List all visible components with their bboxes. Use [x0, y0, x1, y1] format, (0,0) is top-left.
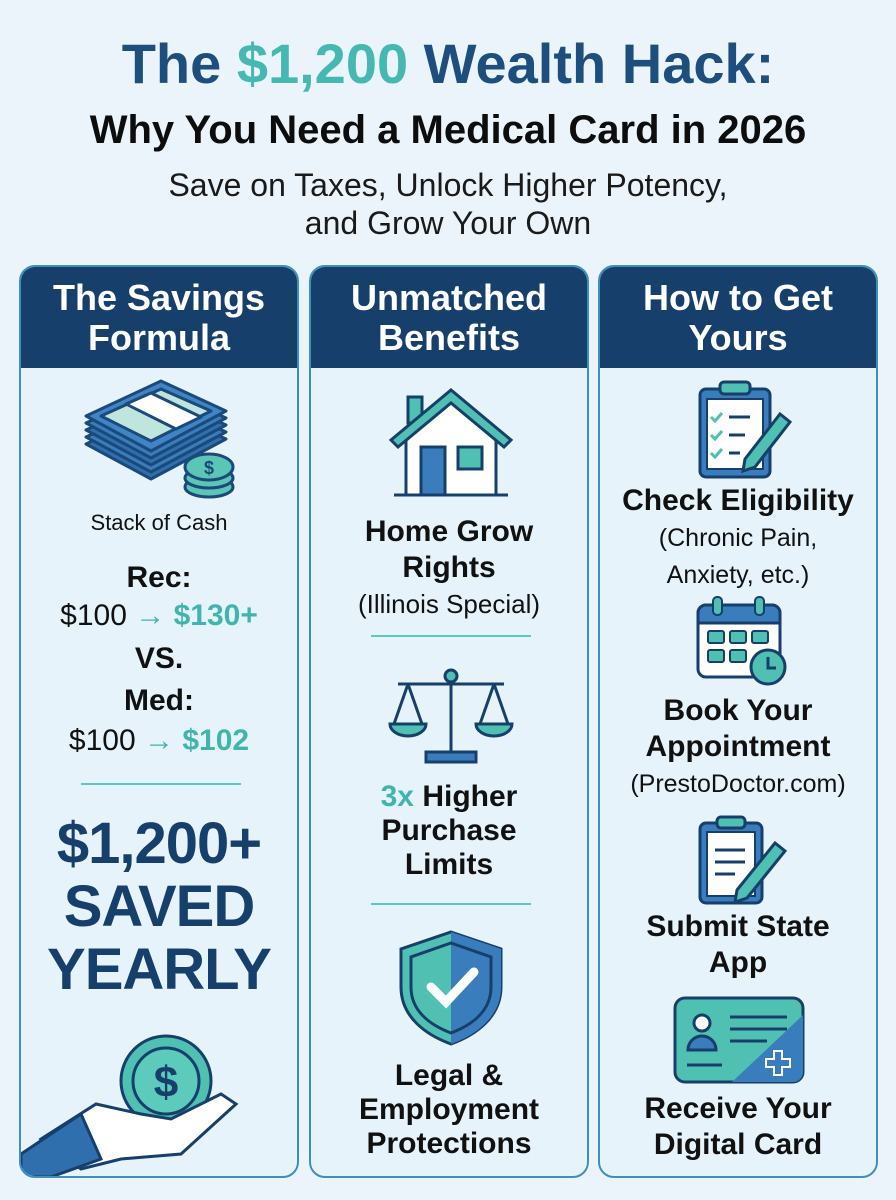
subtitle line: Why You Need a Medical Card in 2026 [90, 108, 806, 152]
heading: Yours [688, 317, 788, 358]
benefit: home grow: Rights [402, 551, 496, 584]
step: book appointment [630, 694, 846, 798]
step: check eligibility: Anxiety, etc.) [667, 561, 809, 589]
big savings stat [47, 811, 271, 1002]
heading: Formula [88, 317, 230, 358]
icon: stack of cash [84, 380, 234, 498]
step: book appointment: Appointment [646, 730, 830, 763]
icon: clipboard checklist [698, 380, 792, 478]
icon: clipboard with pen [698, 816, 788, 904]
title: The $1,200 Wealth Hack: [122, 32, 774, 95]
heading [600, 267, 876, 368]
benefit: home grow [358, 515, 540, 619]
big savings stat: $1,200+ [57, 811, 261, 876]
step: book appointment: (PrestoDoctor.com) [630, 770, 846, 798]
step: book appointment: Book Your [664, 694, 812, 727]
med price: Med: [124, 684, 194, 717]
benefit: purchase limits [381, 780, 517, 881]
heading: How to Get [643, 277, 833, 318]
rec price: $100 → $130+ [60, 599, 258, 632]
step: receive card: Receive Your [644, 1092, 832, 1125]
heading: The Savings [53, 277, 265, 318]
benefit: legal protections: Protections [366, 1127, 532, 1160]
label: stack of cash: Stack of Cash [91, 510, 227, 535]
benefit: legal protections: Legal & [395, 1059, 503, 1092]
step: check eligibility: (Chronic Pain, [659, 524, 817, 552]
step: submit state app: App [709, 946, 767, 979]
benefit: purchase limits: Limits [405, 848, 493, 881]
rec price [60, 561, 258, 632]
step: submit state app [646, 910, 830, 979]
med price [69, 684, 249, 757]
panel: how to get yours [598, 265, 878, 1178]
big savings stat: YEARLY [47, 937, 271, 1002]
big savings stat: SAVED [64, 874, 254, 939]
tagline [168, 167, 728, 241]
heading: Benefits [378, 317, 520, 358]
icon: stack of cash: $ [204, 458, 214, 478]
icon: shield [400, 930, 502, 1046]
benefit: purchase limits: 3x Higher [381, 780, 517, 813]
heading [21, 267, 297, 368]
icon: calendar [696, 596, 786, 686]
benefit: legal protections: Employment [359, 1093, 539, 1126]
step: check eligibility: Check Eligibility [622, 484, 854, 517]
icon: hand with coin: $ [154, 1058, 178, 1107]
med price: $100 → $102 [69, 724, 249, 757]
heading: Unmatched [351, 277, 547, 318]
vs: VS. [135, 642, 183, 675]
tagline: Save on Taxes, Unlock Higher Potency, [168, 167, 728, 203]
step: receive card [644, 1092, 832, 1161]
icon: digital card [674, 996, 804, 1084]
rec price: Rec: [126, 561, 192, 594]
benefit: purchase limits: Purchase [381, 814, 517, 847]
step: receive card: Digital Card [654, 1128, 822, 1161]
heading [311, 267, 587, 368]
icon: scale [388, 668, 514, 764]
benefit: home grow: Home Grow [365, 515, 533, 548]
icon: hand with coin [21, 1034, 238, 1176]
step: check eligibility [622, 484, 854, 589]
step: submit state app: Submit State [646, 910, 830, 943]
panel: unmatched benefits [309, 265, 589, 1178]
benefit: home grow: (Illinois Special) [358, 589, 540, 619]
tagline: and Grow Your Own [305, 205, 591, 241]
panel: savings formula [19, 265, 299, 1178]
benefit: legal protections [359, 1059, 539, 1160]
icon: house [388, 388, 514, 496]
